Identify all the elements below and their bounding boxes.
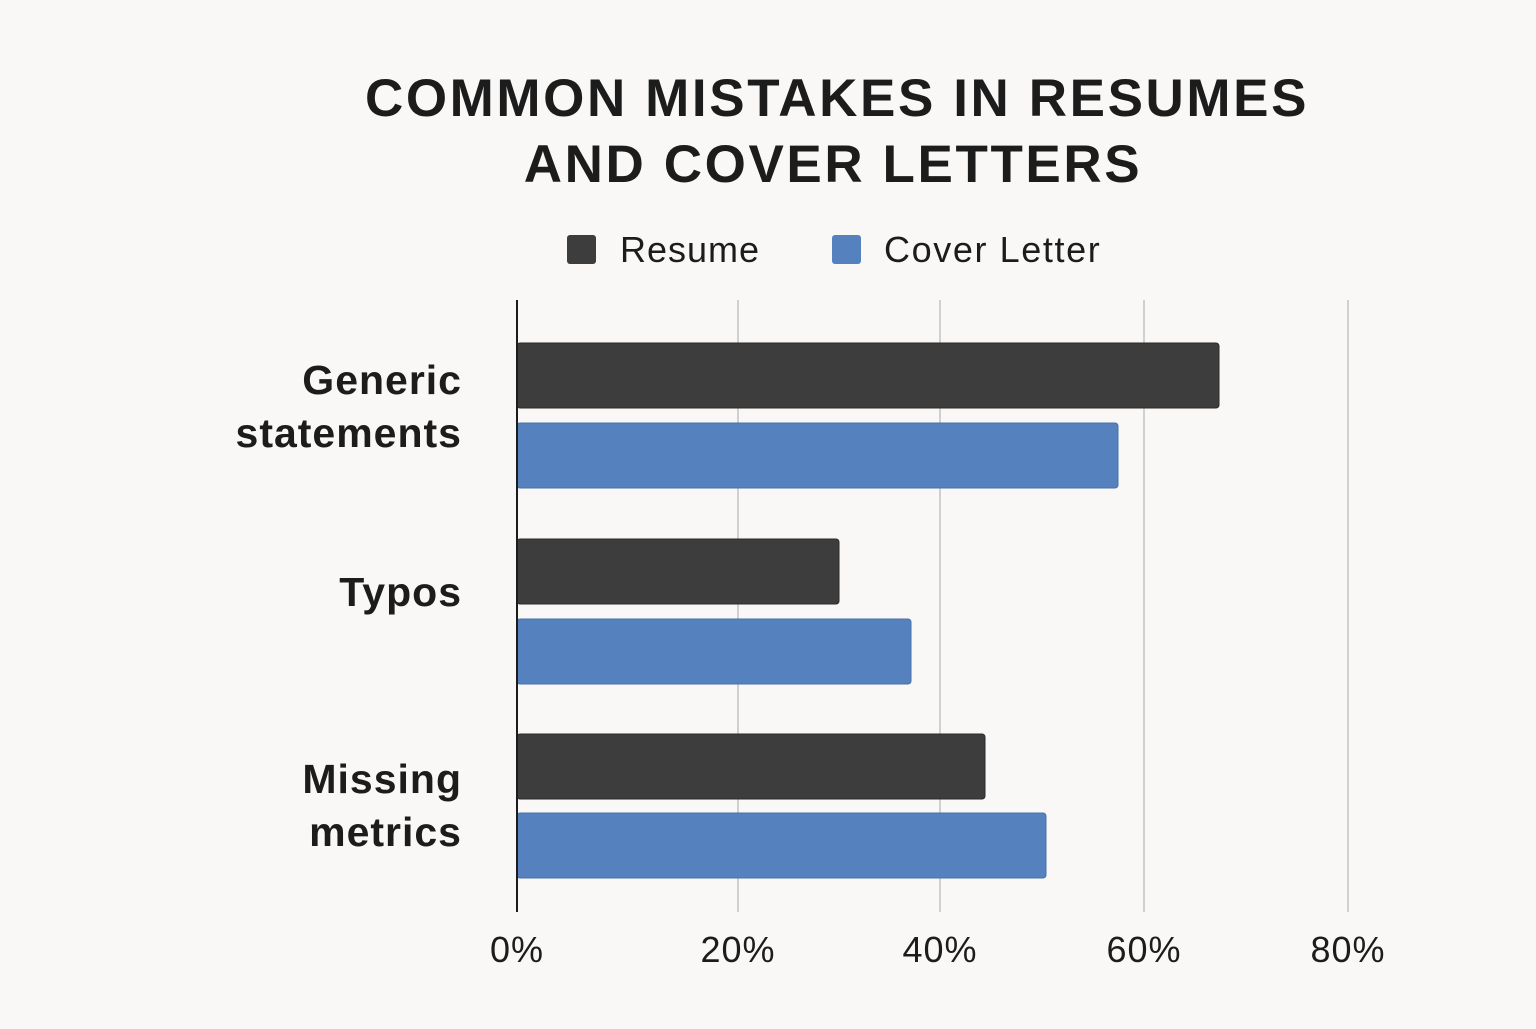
title: COMMON MISTAKES IN RESUMES	[365, 69, 1309, 128]
bar chart	[236, 300, 1386, 970]
category labels: Missing	[302, 756, 462, 802]
title: AND COVER LETTERS	[524, 135, 1142, 194]
x axis tick labels: 80%	[1310, 929, 1386, 970]
x axis tick labels	[490, 929, 1386, 970]
category labels	[236, 357, 462, 855]
category labels: Typos	[339, 569, 462, 615]
x axis tick labels: 40%	[902, 929, 978, 970]
bars: typos	[517, 539, 911, 684]
title	[365, 69, 1309, 194]
legend item: cover letter: Cover Letter	[884, 229, 1101, 270]
x axis tick labels: 60%	[1106, 929, 1182, 970]
category labels: Generic	[302, 357, 462, 403]
y axis	[516, 300, 518, 912]
x axis tick labels: 0%	[490, 929, 544, 970]
legend	[567, 229, 1101, 270]
bars: generic statements	[517, 343, 1219, 488]
category labels: statements	[236, 410, 462, 456]
category labels: metrics	[309, 809, 462, 855]
bars: missing metrics	[517, 734, 1046, 878]
legend item: resume: Resume	[620, 229, 760, 270]
x axis tick labels: 20%	[700, 929, 776, 970]
